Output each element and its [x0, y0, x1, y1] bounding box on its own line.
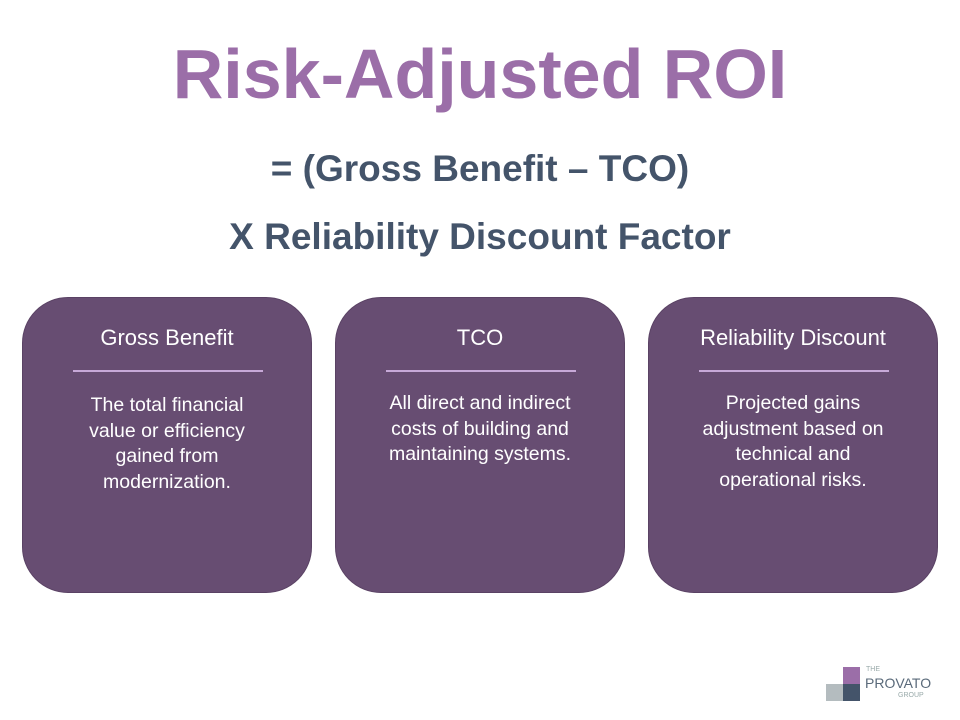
logo: THE [866, 666, 880, 673]
panel: TCO [335, 297, 625, 593]
formula line 1: = (Gross Benefit – TCO) [271, 148, 689, 189]
panel: reliability discount: Projected gains adjustment based on technical and operational risks. [702, 392, 884, 490]
panel: gross benefit [22, 297, 312, 593]
logo [826, 666, 931, 701]
panel: reliability discount: Reliability Discount [700, 325, 886, 350]
panel: reliability discount [648, 297, 938, 593]
panel: gross benefit: The total financial value or efficiency gained from modernization. [89, 394, 245, 492]
logo: PROVATO [865, 675, 931, 691]
panel: gross benefit: Gross Benefit [100, 325, 234, 350]
logo: GROUP [898, 692, 924, 699]
formula line 2: X Reliability Discount Factor [229, 216, 731, 257]
title: Risk-Adjusted ROI [173, 35, 787, 113]
panel: TCO: TCO [457, 325, 503, 350]
panel: TCO: All direct and indirect costs of building and maintaining systems. [389, 392, 571, 465]
